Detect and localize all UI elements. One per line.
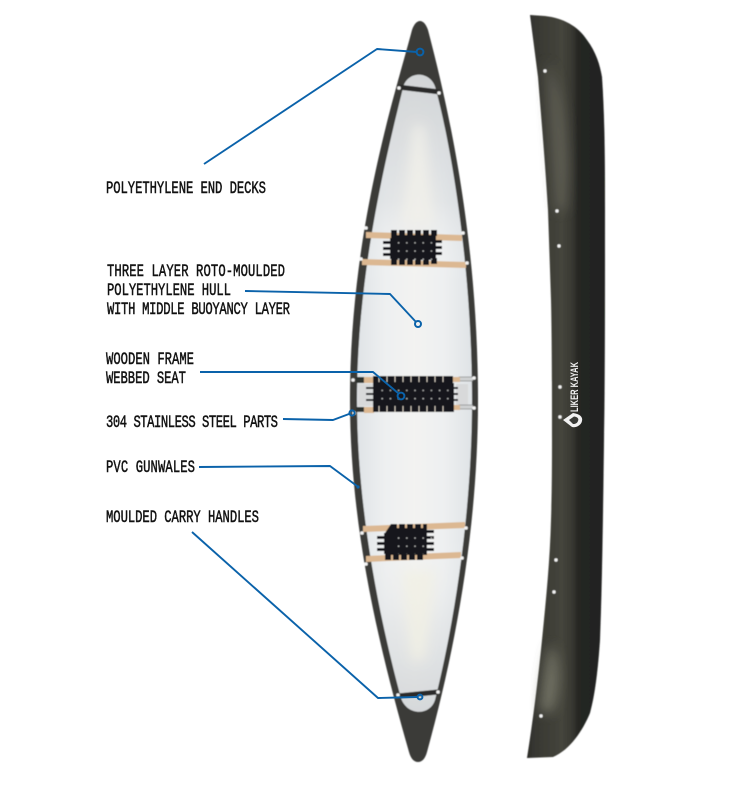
leader: gunwales <box>199 466 360 489</box>
middle seat steel tubes <box>459 377 473 409</box>
bottom carry handle <box>398 692 438 696</box>
top seat webbing holes <box>392 238 436 262</box>
label: wooden frame webbed seat <box>106 351 194 389</box>
top seat wooden frame <box>362 232 466 268</box>
label: pvc gunwales: PVC GUNWALES <box>106 459 195 478</box>
middle seat webbing <box>366 376 458 412</box>
middle seat wood ends <box>364 377 460 413</box>
leader: hull <box>245 291 421 327</box>
side hull highlight bottom <box>540 645 559 712</box>
middle seat steel blocks <box>358 384 468 406</box>
hull end shading <box>357 75 472 712</box>
hull centre highlight bottom <box>402 570 436 660</box>
bottom seat webbing <box>377 524 434 560</box>
middle seat <box>356 376 473 413</box>
leader: end decks <box>204 49 423 164</box>
canoe top view <box>350 21 478 762</box>
middle seat brackets <box>356 377 364 412</box>
top seat webbing <box>383 230 442 265</box>
label: moulded carry handles: MOULDED CARRY HANDLES <box>106 509 259 528</box>
gunwale bolts <box>351 86 476 697</box>
label: wooden frame webbed seat: WOODEN FRAME <box>106 351 194 370</box>
hull centre highlight top <box>402 125 434 225</box>
leader: carry handles <box>192 532 422 699</box>
label: stainless steel parts: 304 STAINLESS STEEL PARTS <box>106 414 278 433</box>
label: three layer hull: POLYETHYLENE HULL <box>107 282 231 301</box>
label: three layer hull: THREE LAYER ROTO-MOULDED <box>107 263 285 282</box>
bottom seat webbing holes <box>392 531 436 554</box>
canoe gunwale and end decks <box>350 21 478 762</box>
leader: seat <box>200 372 404 399</box>
bottom seat wooden frame <box>363 522 465 562</box>
top carry handle <box>398 87 440 92</box>
middle seat strap gaps <box>379 376 443 412</box>
side hull bolts <box>539 69 562 718</box>
bottom seat <box>363 522 465 562</box>
canoe side view <box>527 15 605 758</box>
middle seat webbing holes <box>376 385 452 405</box>
side hull highlight top <box>546 62 568 210</box>
side hull shape <box>527 15 605 758</box>
label: three layer hull <box>107 263 290 320</box>
label: wooden frame webbed seat: WEBBED SEAT <box>106 370 186 389</box>
brand logo icon <box>563 413 582 427</box>
leader: stainless steel <box>283 410 355 420</box>
canoe hull interior <box>357 75 472 712</box>
label: three layer hull: WITH MIDDLE BUOYANCY LAYER <box>107 301 290 320</box>
label: polyethylene end decks: POLYETHYLENE END DECKS <box>106 180 266 199</box>
brand name: LIKER KAYAK <box>569 362 581 412</box>
top seat <box>362 230 466 268</box>
